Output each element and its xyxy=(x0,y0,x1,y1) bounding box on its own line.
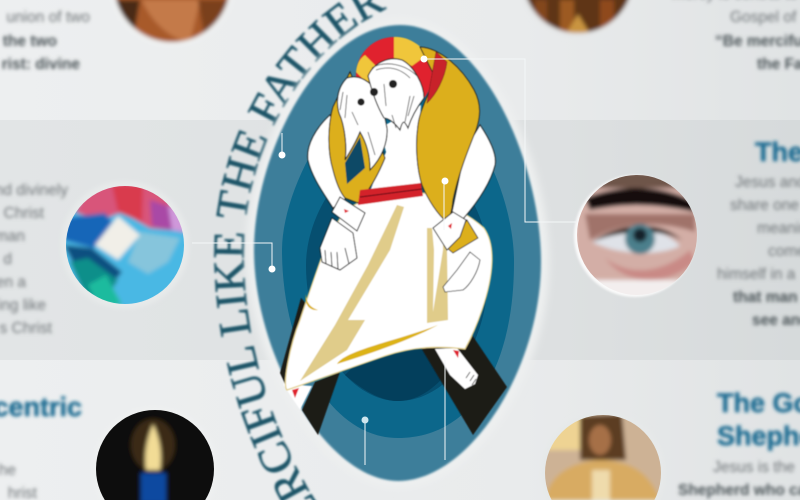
figure: Adam's upper foot xyxy=(443,252,480,292)
figure: right arm xyxy=(452,125,495,219)
figure: hand wound xyxy=(344,209,349,213)
left column text: top block: union of two xyxy=(6,9,90,26)
photo circle: top right, brown and gold xyxy=(524,0,632,36)
figure: robe right folds xyxy=(427,228,448,323)
figure: halo xyxy=(356,37,432,113)
figure: dark legs xyxy=(280,298,507,435)
figure: Adam's hanging hand xyxy=(320,218,357,270)
jubilee logo mandorla xyxy=(254,25,541,481)
left column text: top block: the two xyxy=(3,33,57,50)
photo circle: good shepherd xyxy=(545,415,661,500)
left column text: middle block: d xyxy=(3,251,12,268)
photo circle: eye xyxy=(574,172,700,302)
left column text: middle block: s Christ xyxy=(0,320,53,337)
left column text: top block xyxy=(2,9,90,73)
photo circle: candle xyxy=(96,410,214,500)
figure: dark neck opening xyxy=(345,137,365,184)
right column heading and text: good shepherd xyxy=(678,388,800,499)
right column text: top block: Gospel of xyxy=(730,9,797,26)
right column heading and text: middle block xyxy=(717,137,800,329)
mandorla glow xyxy=(246,18,549,488)
figure: Christ's head xyxy=(368,59,424,130)
figure: Adam's cloak end xyxy=(447,220,478,253)
figure: gold cloak right xyxy=(417,47,480,222)
figure: left arm xyxy=(308,115,345,208)
figure: robe lightning fold xyxy=(300,205,404,381)
figure: Christ's left hand xyxy=(332,197,365,231)
left column text: middle block: Christ xyxy=(4,205,45,222)
figure: gold hem swoosh xyxy=(337,325,438,364)
figure: hand wound right xyxy=(448,223,452,229)
connector lines and dots xyxy=(192,56,576,465)
right column heading and text: middle block: share one xyxy=(730,197,799,214)
figure: lower foot of Adam xyxy=(283,384,312,410)
figure: torso xyxy=(370,105,421,191)
right column heading and text: middle block: that man xyxy=(733,289,798,306)
figure: right foot xyxy=(435,348,478,389)
figure: Christ carrying Adam xyxy=(280,37,507,435)
logo: deep blue layer xyxy=(306,150,489,401)
right column heading and text: middle block: himself in a xyxy=(717,266,796,283)
left column heading and text: bottom block xyxy=(0,392,82,500)
photo circle: top left, orange folds xyxy=(114,0,230,45)
right column heading and text: good shepherd: Jesus is the xyxy=(713,459,795,476)
figure: red cloak band xyxy=(427,52,447,103)
logo: outer blue layer xyxy=(254,25,541,481)
figure: white robe xyxy=(285,193,492,390)
figure: gold cloak left xyxy=(329,72,385,203)
logo: middle blue layer xyxy=(282,85,514,438)
figure: Adam's head xyxy=(337,77,387,170)
left column text: top block: rist: divine xyxy=(2,56,80,73)
logo: darkest centre xyxy=(345,345,455,401)
photo circle: colour swatches xyxy=(66,186,184,304)
figure: Christ's right hand xyxy=(433,212,466,250)
left column text: middle block xyxy=(0,182,68,337)
right column text: top block xyxy=(672,0,800,73)
figure: red belt xyxy=(358,183,423,205)
